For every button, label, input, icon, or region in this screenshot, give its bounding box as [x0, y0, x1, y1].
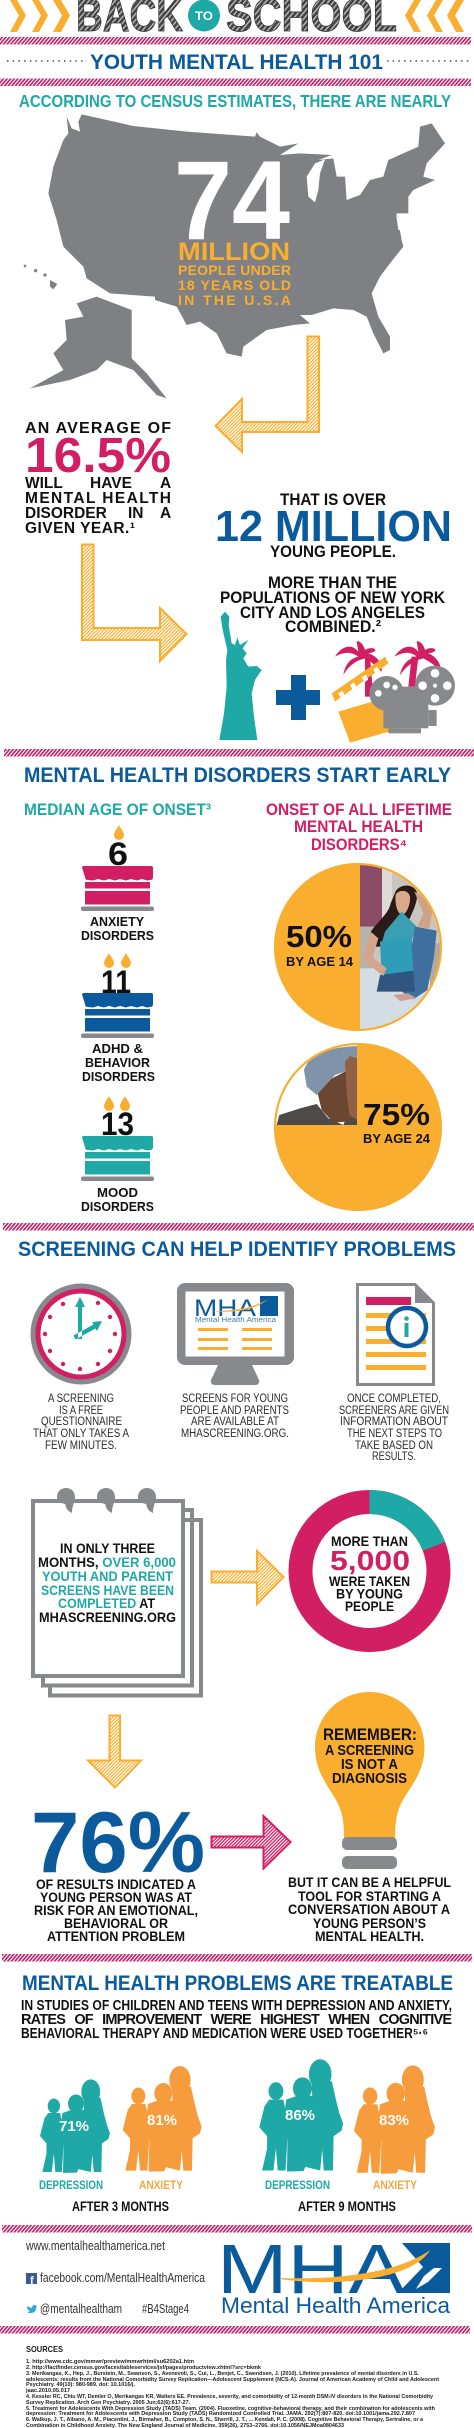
- contact links: @mentalhealtham: [40, 2302, 122, 2316]
- icon: computer monitor: [177, 1283, 294, 1385]
- badge: TO: TO: [195, 9, 213, 23]
- caption: free questionnaire: [33, 1393, 129, 1452]
- labels: 9 month results: DEPRESSION: [265, 2178, 330, 2192]
- stat: 12 million: YOUNG PEOPLE.: [270, 542, 396, 561]
- family: depression after 9 months: [259, 2059, 343, 2172]
- pie chart: 75 percent by age 24: [273, 1043, 442, 1211]
- icon: computer monitor: MHA: [194, 1295, 256, 1322]
- stat: 16.5 percent: A: [160, 505, 171, 522]
- contact links: [25, 2239, 205, 2316]
- right chevrons: [405, 0, 464, 32]
- labels: 9 month results: [265, 2178, 417, 2214]
- caption: next steps: SCREENERS ARE GIVEN: [339, 1405, 449, 1417]
- icon: clock: [30, 1284, 132, 1384]
- stat: 16.5 percent: WILL: [25, 475, 63, 492]
- family: depression after 3 months: 71%: [59, 2119, 89, 2135]
- stat: 16.5 percent: GIVEN YEAR.¹: [25, 520, 135, 537]
- notebook with screening count: IN ONLY THREE: [60, 1540, 155, 1556]
- stat: 12 million: MORE THAN THE: [268, 573, 397, 592]
- cake: ADHD and behavior disorders, age 11: BEHAVIOR: [85, 1055, 151, 1070]
- stat: 16.5 percent: HAVE: [90, 475, 132, 492]
- subheading: median age: MEDIAN AGE OF ONSET³: [24, 800, 211, 819]
- sources: 3. Merikangas, K., Hep, J., Burstein, M., Swanson, S., Avenevoli, S., Cui, L., Benjet, C., Swendsen, J. (2010). Lifetime prevalence of mental disorders in U.S.: [26, 2371, 420, 2377]
- icon: twitter: [27, 2305, 37, 2313]
- donut chart: 5,000 by young people: MORE THAN: [331, 1533, 408, 1549]
- family: anxiety after 9 months: 83%: [379, 2113, 409, 2129]
- icon: computer monitor: Mental Health America: [195, 1317, 276, 1324]
- caption: screens available: MHASCREENING.ORG.: [181, 1428, 289, 1440]
- family: depression after 3 months: [40, 2079, 110, 2173]
- caption: next steps: TAKE BASED ON: [355, 1440, 433, 1452]
- caption: screens available: ARE AVAILABLE AT: [191, 1416, 279, 1428]
- arrow: map to percentage: [216, 336, 319, 452]
- logo: Mental Health America: [217, 2230, 451, 2318]
- stat: 12 million: COMBINED.²: [285, 617, 381, 636]
- arrow: 76 percent to light bulb: [212, 1816, 290, 1868]
- caption: next steps: INFORMATION ABOUT: [340, 1416, 448, 1428]
- sources: 2. http://factfinder.census.gov/faces/tableservices/jsf/pages/productview.xhtml?src=bkmk: [26, 2365, 261, 2371]
- labels: 9 month results: AFTER 9 MONTHS: [298, 2198, 396, 2214]
- sources: depression: Treatment for Adolescents with Depression Study (TADS) Randomized Controlled Trial. JAMA. 292(7):807-820. doi:10.1001/jama.292.7.807: [26, 2411, 415, 2417]
- caption: next steps: [339, 1393, 449, 1463]
- text: helpful tool: CONVERSATION ABOUT A: [288, 1902, 450, 1917]
- caption: free questionnaire: A SCREENING: [48, 1393, 114, 1405]
- donut chart: 5,000 by young people: BY YOUNG: [336, 1586, 403, 1602]
- icon: light bulb with reminder: [315, 1692, 424, 1869]
- icon: document with info symbol: [358, 1284, 434, 1384]
- subheading: lifetime onset: MENTAL HEALTH: [294, 817, 423, 836]
- stat: 12 million: THAT IS OVER: [280, 490, 386, 509]
- family: anxiety after 3 months: 81%: [147, 2113, 177, 2129]
- pie chart: 75 percent by age 24: 75%: [363, 1097, 430, 1132]
- pie chart: 50 percent by age 14: 50%: [286, 919, 352, 954]
- text: helpful tool: YOUNG PERSON’S: [313, 1916, 426, 1931]
- sources: 5. Treatment for Adolescents With Depression Study (TADS) Team. (2004). Fluoxetine, cognitive-behavioral therapy, and their combination for adolescents with: [26, 2406, 435, 2412]
- caption: next steps: THE NEXT STEPS TO: [347, 1428, 442, 1440]
- photo: young woman sitting: [360, 865, 440, 1029]
- stat: 16.5 percent: IN: [128, 505, 144, 522]
- stat: 76 percent: ATTENTION PROBLEM: [47, 1929, 185, 1944]
- heading: disorders start early: MENTAL HEALTH DISORDERS START EARLY: [24, 764, 451, 787]
- caption: next steps: ONCE COMPLETED,: [347, 1393, 441, 1405]
- pie 2 ring: [275, 1044, 441, 1210]
- cake: mood disorders, age 13: 13: [101, 1106, 134, 1142]
- arrow: notebook to donut: [212, 1551, 284, 1604]
- notebook with screening count: COMPLETED AT: [58, 1595, 155, 1611]
- stat: 76 percent: RISK FOR AN EMOTIONAL,: [34, 1903, 198, 1918]
- contact links: www.mentalhealthamerica.net: [25, 2239, 165, 2253]
- labels: 3 month results: [39, 2178, 183, 2214]
- labels: 3 month results: ANXIETY: [139, 2178, 183, 2192]
- stat: 76 percent: OF RESULTS INDICATED A: [36, 1877, 196, 1892]
- icon: statue of liberty: [219, 612, 262, 740]
- stat: 76 percent: BEHAVIORAL OR: [64, 1916, 168, 1931]
- text: helpful tool: [288, 1875, 451, 1944]
- icon: light bulb with reminder: A SCREENING: [325, 1743, 414, 1759]
- contact links: #B4Stage4: [142, 2302, 189, 2316]
- text: helpful tool: MENTAL HEALTH.: [315, 1929, 424, 1944]
- stat: 76 percent: 76%: [31, 1795, 205, 1891]
- labels: 9 month results: ANXIETY: [373, 2178, 417, 2192]
- labels: 3 month results: AFTER 3 MONTHS: [72, 2198, 169, 2214]
- caption: free questionnaire: IS A FREE: [59, 1405, 103, 1417]
- icon: facebook: f: [30, 2275, 34, 2287]
- donut chart: 5,000 by young people: WERE TAKEN: [329, 1573, 410, 1589]
- caption: free questionnaire: FEW MINUTES.: [45, 1440, 117, 1452]
- stat: 16.5 percent: DISORDER: [25, 505, 107, 522]
- stat: 74 million: IN THE U.S.A: [178, 292, 291, 308]
- notebook with screening count: SCREENS HAVE BEEN: [41, 1582, 174, 1598]
- logo: Mental Health America: MHA: [217, 2230, 405, 2308]
- photo: young man with hand on head: [273, 1043, 358, 1125]
- subheading: lifetime onset: [266, 800, 452, 854]
- family: anxiety after 9 months: [354, 2065, 435, 2174]
- labels: 3 month results: DEPRESSION: [39, 2178, 103, 2192]
- icon: light bulb with reminder: REMEMBER:: [323, 1725, 417, 1744]
- notebook with screening count: MHASCREENING.ORG: [39, 1609, 176, 1625]
- left chevrons: [10, 0, 70, 32]
- stat: 12 million: 12 MILLION: [215, 502, 452, 551]
- stat: 74 million: PEOPLE UNDER: [178, 262, 291, 278]
- stat: 12 million: POPULATIONS OF NEW YORK: [220, 588, 446, 607]
- arrow: percentage to young people: [82, 544, 186, 661]
- cake: ADHD and behavior disorders, age 11: 11: [101, 964, 131, 1000]
- sources: jaac.2010.05.017: [25, 2388, 70, 2394]
- icon: palm trees, clapperboard and film projector: [332, 641, 455, 743]
- text: helpful tool: BUT IT CAN BE A HELPFUL: [288, 1875, 451, 1890]
- subheading: lifetime onset: ONSET OF ALL LIFETIME: [266, 800, 452, 819]
- stat: 74 million: 18 YEARS OLD: [178, 277, 291, 293]
- cake: mood disorders, age 13: DISORDERS: [81, 1199, 154, 1214]
- contact links: facebook.com/MentalHealthAmerica: [40, 2271, 205, 2285]
- sources: SOURCES: [26, 2344, 63, 2354]
- donut chart: 5,000 by young people: 5,000: [330, 1545, 410, 1576]
- stat: 74 million: MILLION: [178, 238, 290, 266]
- text: studies paragraph: [21, 1998, 452, 2042]
- cake: ADHD and behavior disorders, age 11: DISORDERS: [82, 1069, 155, 1084]
- cake: mood disorders, age 13: MOOD: [97, 1185, 138, 1200]
- notebook with screening count: [33, 1488, 201, 1696]
- pie chart: 75 percent by age 24: BY AGE 24: [363, 1131, 431, 1146]
- stat: 12 million: [215, 490, 452, 636]
- sources: 1. http://www.cdc.gov/mmwr/preview/mmwrhtml/su6202a1.htm: [26, 2359, 194, 2365]
- cake: anxiety disorders, age 6: 6: [108, 836, 128, 872]
- caption: screens available: PEOPLE AND PARENTS: [180, 1405, 289, 1417]
- cake: mood disorders, age 13: [81, 1096, 154, 1214]
- cake: ADHD and behavior disorders, age 11: ADHD &: [92, 1041, 143, 1056]
- icon: facebook: [26, 2273, 37, 2287]
- stat: 74 million: 74: [174, 138, 290, 263]
- caption: screens available: [180, 1393, 289, 1440]
- cake: anxiety disorders, age 6: DISORDERS: [81, 928, 154, 943]
- icon: light bulb with reminder: DIAGNOSIS: [332, 1771, 407, 1787]
- logo: Mental Health America: Mental Health America: [221, 2293, 451, 2318]
- stat: 16.5 percent: 16.5%: [25, 429, 171, 483]
- pie chart: 50 percent by age 14: [274, 863, 447, 1033]
- text: helpful tool: TOOL FOR STARTING A: [298, 1889, 441, 1904]
- donut chart: 5,000 by young people: PEOPLE: [345, 1598, 394, 1614]
- sources: Psychiatry. 49(10): 980-989. doi: 10.1016/j.: [26, 2382, 136, 2388]
- family: anxiety after 3 months: [123, 2066, 202, 2172]
- subheading: lifetime onset: DISORDERS⁴: [311, 835, 407, 854]
- caption: free questionnaire: QUESTIONNAIRE: [41, 1416, 122, 1428]
- sources: Survey Replication. Arch Gen Psychiatry. 2005 Jun;62(6):617-27.: [26, 2400, 191, 2406]
- family: depression after 9 months: 86%: [285, 2108, 315, 2124]
- sources: 4. Kessler RC, Chiu WT, Demler O, Merikangas KR, Walters EE. Prevalence, severity, and comorbidity of 12-month DSM-IV disorders in the National Comorbidity: [26, 2394, 433, 2400]
- cake: ADHD and behavior disorders, age 11: [81, 953, 155, 1084]
- header: back to school: [10, 0, 464, 41]
- notebook with screening count: MONTHS, OVER 6,000: [38, 1554, 176, 1570]
- stat: 76 percent: [31, 1795, 205, 1944]
- sources: 6. Walkup, J. T., Albano, A. M., Piacentini, J., Birmaher, B., Compton, S. N., Sherrill, J. T., ... Kendall, P. C. (2008). Cognitive Behavioral Therapy, Sertraline, or a: [26, 2417, 423, 2423]
- arrow: notebook to 76 percent: [88, 1716, 141, 1788]
- stat: 76 percent: YOUNG PERSON WAS AT: [40, 1890, 193, 1905]
- text: studies paragraph: RATES OF IMPROVEMENT WERE HIGHEST WHEN COGNITIVE: [21, 2012, 452, 2028]
- donut chart: 5,000 by young people: [300, 1490, 445, 1640]
- caption: next steps: RESULTS.: [372, 1451, 416, 1463]
- pie 1 ring: [275, 864, 441, 1030]
- icon: plus sign: [276, 675, 320, 720]
- stat: 16.5 percent: AN AVERAGE OF: [25, 420, 171, 437]
- stat: 16.5 percent: MENTAL HEALTH: [25, 490, 171, 507]
- map of the USA: [24, 114, 445, 398]
- title: YOUTH MENTAL HEALTH 101: [90, 51, 383, 74]
- icon: light bulb with reminder: IS NOT A: [341, 1757, 398, 1773]
- heading: screening: SCREENING CAN HELP IDENTIFY PROBLEMS: [18, 1238, 456, 1261]
- stat: 16.5 percent: A: [160, 475, 171, 492]
- caption: screens available: SCREENS FOR YOUNG: [182, 1393, 288, 1405]
- notebook with screening count: YOUTH AND PARENT: [42, 1568, 173, 1584]
- cake: anxiety disorders, age 6: ANXIETY: [90, 914, 144, 929]
- stat: 16.5 percent: [25, 420, 171, 537]
- stat: 12 million: CITY AND LOS ANGELES: [240, 603, 425, 622]
- badge: TO: [188, 0, 220, 32]
- cake: anxiety disorders, age 6: [81, 825, 154, 943]
- caption: free questionnaire: THAT ONLY TAKES A: [33, 1428, 129, 1440]
- sources: adolescents: results from the National Comorbidity Survey Replication—Adolescent Supplement (NCS-A). Journal of American Academy of Child and Adolescent: [26, 2377, 439, 2383]
- pie chart: 50 percent by age 14: BY AGE 14: [286, 954, 354, 969]
- sources: [25, 2344, 439, 2428]
